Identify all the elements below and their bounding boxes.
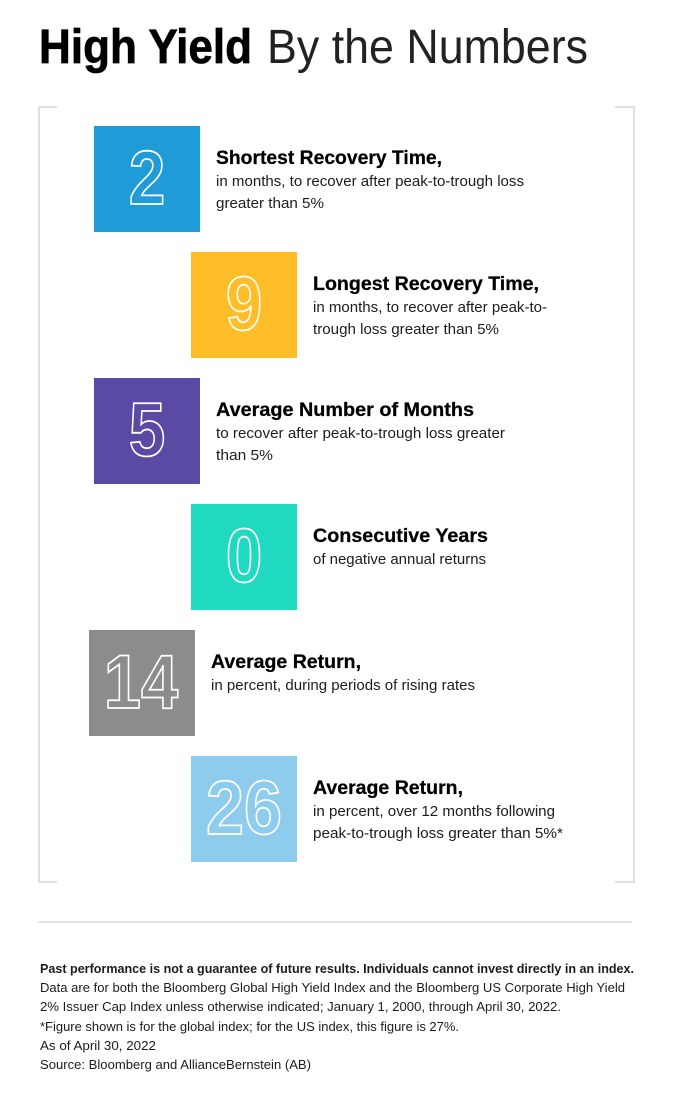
title: By the Numbers xyxy=(267,21,588,74)
footnotes: As of April 30, 2022 xyxy=(40,1039,156,1053)
text: average return after loss: in percent, over 12 months following xyxy=(313,804,555,820)
text: longest recovery time: in months, to recover after peak-to- xyxy=(313,300,547,316)
left frame bracket xyxy=(39,107,57,882)
panel: average return after loss xyxy=(191,756,563,862)
text: average return after loss xyxy=(313,777,563,842)
text: shortest recovery time xyxy=(216,147,524,212)
tile: 0 xyxy=(191,504,297,610)
tile: 26: 26 xyxy=(206,767,282,851)
tile: 14 xyxy=(89,630,195,736)
text: average return rising rates: Average Return, xyxy=(211,651,361,673)
tile: 5 xyxy=(94,378,200,484)
text: consecutive years: Consecutive Years xyxy=(313,525,488,547)
tile: 2 xyxy=(94,126,200,232)
text: average number of months: Average Number of Months xyxy=(216,399,474,421)
text: average return rising rates xyxy=(211,651,475,694)
tile: 0: 0 xyxy=(226,514,262,599)
footnotes: 2% Issuer Cap Index unless otherwise indicated; January 1, 2000, through April 30, 2022. xyxy=(40,1000,561,1014)
panel: shortest recovery time xyxy=(94,126,524,232)
text: shortest recovery time: in months, to recover after peak-to-trough loss xyxy=(216,174,524,190)
text: average return after loss: peak-to-trough loss greater than 5%* xyxy=(313,826,563,842)
text: shortest recovery time: greater than 5% xyxy=(216,196,324,212)
text: shortest recovery time: Shortest Recovery Time, xyxy=(216,147,442,169)
text: average return rising rates: in percent, during periods of rising rates xyxy=(211,678,475,694)
panel: consecutive years xyxy=(191,504,488,610)
footnotes: Past performance is not a guarantee of future results. Individuals cannot invest directly in an index. xyxy=(40,962,634,976)
tile: 9 xyxy=(191,252,297,358)
text: longest recovery time xyxy=(313,273,547,338)
panel: average number of months xyxy=(94,378,505,484)
right frame bracket xyxy=(615,107,634,882)
tile: 26 xyxy=(191,756,297,862)
footnotes xyxy=(40,962,634,1072)
title: High Yield xyxy=(39,21,252,74)
tile: 14: 14 xyxy=(104,640,178,725)
text: longest recovery time: Longest Recovery Time, xyxy=(313,273,539,295)
footnotes: *Figure shown is for the global index; for the US index, this figure is 27%. xyxy=(40,1020,459,1034)
footnotes: Data are for both the Bloomberg Global High Yield Index and the Bloomberg US Corporate High Yield xyxy=(40,981,625,995)
panel: average return rising rates xyxy=(89,630,475,736)
text: average number of months: to recover after peak-to-trough loss greater xyxy=(216,426,505,442)
footnotes: Source: Bloomberg and AllianceBernstein (AB) xyxy=(40,1058,311,1072)
tile: 9: 9 xyxy=(226,262,262,347)
text: consecutive years: of negative annual returns xyxy=(313,552,486,568)
text: average return after loss: Average Return, xyxy=(313,777,463,799)
panel: longest recovery time xyxy=(191,252,547,358)
text: consecutive years xyxy=(313,525,488,568)
text: average number of months: than 5% xyxy=(216,448,273,464)
text: longest recovery time: trough loss greater than 5% xyxy=(313,322,499,338)
title xyxy=(39,21,588,74)
tile: 2: 2 xyxy=(129,136,165,221)
text: average number of months xyxy=(216,399,505,464)
tile: 5: 5 xyxy=(129,388,165,473)
